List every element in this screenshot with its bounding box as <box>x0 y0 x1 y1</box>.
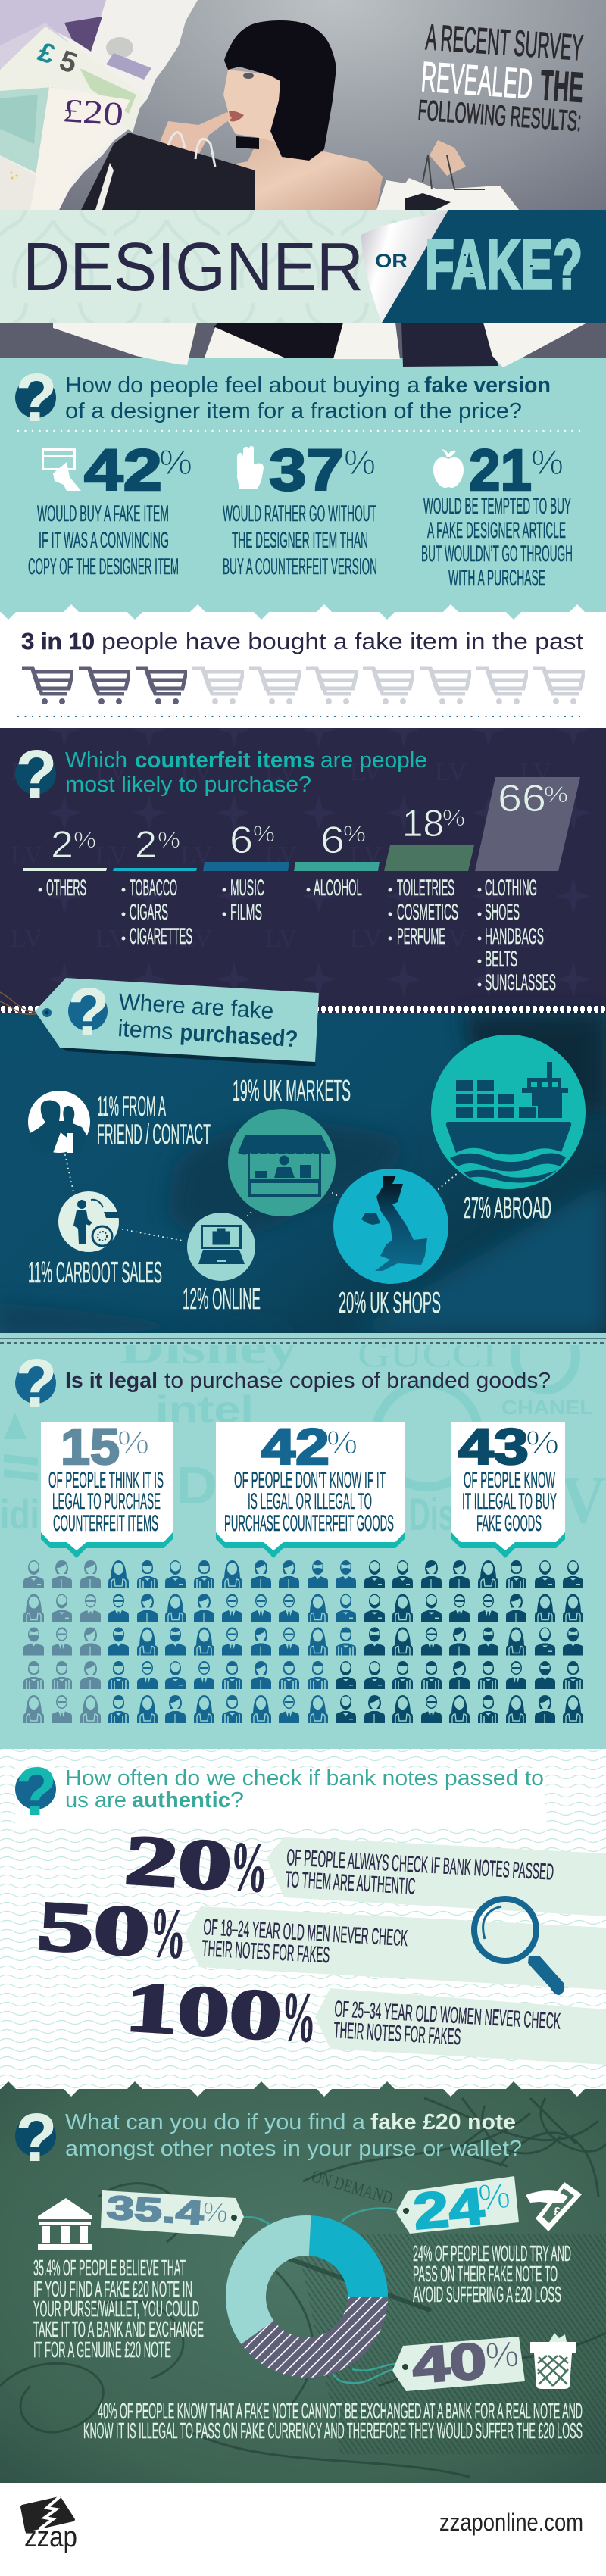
callout: 42%: % <box>326 1424 358 1461</box>
panel: where fake items are purchased: 11% CARBOOT SALES <box>28 1257 162 1289</box>
panel: fake £20 note: YOUR PURSE/WALLET, YOU COULD <box>33 2297 199 2322</box>
callout: 42% <box>216 1419 405 1558</box>
bar values: % <box>442 806 465 831</box>
panel: is it legal: OF PEOPLE THINK IT IS <box>48 1468 164 1493</box>
node: online <box>183 1213 261 1316</box>
panel: is it legal: PURCHASE COUNTERFEIT GOODS <box>224 1511 394 1536</box>
bar values: 6 <box>320 819 345 861</box>
stat band: 20% <box>123 1821 606 1916</box>
heading: amongst other notes in your purse or wallet? <box>65 2137 522 2161</box>
panel: fake £20 note <box>0 2081 606 2483</box>
tag: 40%: 40 <box>411 2332 489 2394</box>
heading: fake version <box>424 373 551 398</box>
header text: a recent survey <box>417 17 585 138</box>
website address: zzaponline.com <box>439 2509 583 2536</box>
heading: people have bought a fake item in the past <box>102 628 583 654</box>
heading: 3 in 10 <box>21 628 95 654</box>
panel: fake £20 note: ON DEMAND <box>309 2167 395 2209</box>
panel: where fake items are purchased: 19% UK MARKETS <box>233 1075 351 1107</box>
text: bank belief <box>33 2256 204 2362</box>
donut chart <box>226 2215 388 2378</box>
text: bank belief: IT FOR A GENUINE £20 NOTE <box>33 2338 171 2362</box>
icon row: shopping carts <box>22 668 584 704</box>
icon: hand passing note <box>526 2182 582 2231</box>
heading <box>65 2110 522 2161</box>
category lists: OTHERS <box>46 876 86 901</box>
panel: is it legal <box>0 1322 606 1750</box>
node: UK markets <box>228 1075 351 1216</box>
banknote engraving texture <box>0 2098 606 2477</box>
banknotes collage <box>0 0 198 210</box>
category lists <box>38 876 556 995</box>
node: abroad <box>431 1035 586 1225</box>
ghost brand logos: Disney <box>120 1322 298 1374</box>
category lists: ALCOHOL <box>314 876 362 901</box>
banknotes collage: £ <box>34 36 59 70</box>
stat: 21% <box>421 438 573 591</box>
bar values: 2 <box>135 823 157 866</box>
bar values: % <box>253 822 275 847</box>
node: friend or contact <box>28 1091 211 1154</box>
node: UK shops <box>333 1169 448 1319</box>
bar values: % <box>158 828 180 853</box>
logo: zzap: zzap <box>24 2521 77 2553</box>
panel: teal survey section <box>0 210 606 612</box>
heading: How do people feel about buying a <box>65 373 420 398</box>
callout: 42%: 42 <box>261 1419 330 1475</box>
price tag heading <box>0 975 319 1066</box>
tag: 40% <box>333 2332 525 2394</box>
question icon: ? <box>16 1346 57 1422</box>
question icon: ? <box>16 361 57 436</box>
price tag heading: Where are fake <box>118 988 274 1024</box>
heading: Is it legal <box>65 1369 158 1393</box>
panel: header photo <box>0 0 606 364</box>
panel: is it legal: LEGAL TO PURCHASE <box>52 1489 161 1514</box>
icon: bank <box>38 2198 92 2250</box>
category lists: TOILETRIES <box>397 876 454 901</box>
heading: What can you do if you find a <box>65 2110 366 2134</box>
banknotes collage: £20 <box>61 92 125 133</box>
heading: of a designer item for a fraction of the price? <box>65 399 522 423</box>
callout: 43% <box>451 1419 565 1558</box>
stat: 42% <box>28 438 192 579</box>
ghost brand logos: CHANEL <box>501 1396 593 1419</box>
panel: where fake items are purchased: 20% UK SHOPS <box>339 1287 441 1319</box>
tag: 24% <box>342 2175 519 2240</box>
bar chart <box>23 777 580 871</box>
category lists: FILMS <box>230 900 262 925</box>
stat: 42%: IF IT WAS A CONVINCING <box>39 528 169 553</box>
tag: 35.4% <box>101 2189 270 2237</box>
panel: teal survey section: BUY A COUNTERFEIT VERSION <box>223 554 377 579</box>
bags below banner <box>53 323 587 367</box>
panel: fake £20 note: 35.4% OF PEOPLE BELIEVE THAT <box>33 2256 186 2281</box>
stat: 42%: % <box>159 442 192 482</box>
price tag heading: purchased? <box>180 1019 298 1052</box>
bar values: 66 <box>498 777 546 820</box>
heading: authentic <box>132 1788 230 1813</box>
icon: hand passing note: £ <box>554 2206 561 2218</box>
bar values: 2 <box>51 823 73 866</box>
panel: 3 in 10 people <box>0 604 606 728</box>
ghost brand logos: D <box>176 1456 217 1515</box>
icon: raised hand <box>237 446 264 489</box>
stat: 42%: 42 <box>84 438 162 503</box>
node: carboot sales <box>28 1191 162 1289</box>
category lists: COSMETICS <box>397 900 458 925</box>
price tag heading: items <box>117 1015 174 1044</box>
heading: are people <box>320 748 427 773</box>
stat: 42%: WOULD BUY A FAKE ITEM <box>37 501 169 526</box>
ghost brand logos <box>2 1345 605 1530</box>
callout: 43%: % <box>526 1424 559 1461</box>
panel: teal survey section: WOULD RATHER GO WITHOUT <box>223 501 376 526</box>
stat band: 100%: % <box>279 1978 319 2057</box>
ghost brand logos: idi <box>0 1491 39 1538</box>
title words <box>23 225 583 305</box>
stat band: 50%: 50 <box>36 1887 152 1972</box>
tag: 35.4%: % <box>202 2196 229 2228</box>
callout: 15%: COUNTERFEIT ITEMS <box>53 1511 158 1536</box>
bar values: % <box>343 822 366 847</box>
stat band: 50%: THEIR NOTES FOR FAKES <box>201 1936 330 1968</box>
stat band: 20%: TO THEM ARE AUTHENTIC <box>285 1867 416 1900</box>
bar values: 6 <box>230 819 253 861</box>
callout: 42%: IS LEGAL OR ILLEGAL TO <box>248 1489 372 1514</box>
panel: footer <box>0 2483 606 2576</box>
category lists: SHOES <box>485 900 520 925</box>
panel: checking bank notes <box>0 1749 606 2097</box>
stat: 37% <box>223 438 377 579</box>
category lists: CLOTHING <box>485 876 537 901</box>
callout: 15% <box>41 1419 173 1558</box>
panel: teal survey section: THE DESIGNER ITEM THAN <box>232 528 368 553</box>
heading: Which <box>65 748 127 773</box>
heading <box>65 373 551 423</box>
heading: most likely to purchase? <box>65 773 311 797</box>
panel: fake £20 note: TAKE IT TO A BANK AND EXCHANGE <box>33 2318 204 2342</box>
ghost brand logos: intel <box>155 1388 254 1431</box>
callout: 43%: 43 <box>458 1419 529 1475</box>
category lists: BELTS <box>485 947 517 972</box>
icon: hand holding card <box>42 448 81 491</box>
stat: 21%: 21 <box>469 438 532 503</box>
panel: where fake items are purchased <box>0 975 606 1333</box>
title words: DESIGNER <box>23 229 364 305</box>
stat band: 20%: % <box>227 1828 270 1907</box>
tag: 24%: 24 <box>411 2178 486 2240</box>
node: friend or contact: 11% FROM A <box>97 1091 166 1122</box>
callout: 15%: 15 <box>61 1419 120 1475</box>
stat band: 50%: % <box>147 1894 189 1974</box>
heading <box>65 1766 544 1813</box>
question icon: ? <box>16 737 57 813</box>
stat: 37%: 37 <box>269 438 344 503</box>
category lists: MUSIC <box>230 876 264 901</box>
question icon: ? <box>16 1754 57 1830</box>
heading: to purchase copies of branded goods? <box>164 1369 551 1393</box>
tag: 35.4%: 35.4 <box>105 2189 205 2232</box>
ghost brand logos: GUCCI <box>358 1332 497 1375</box>
category lists: PERFUME <box>397 924 445 949</box>
icon: waste bin <box>530 2333 576 2389</box>
callout: 15%: % <box>117 1424 149 1461</box>
stat: 37%: % <box>344 442 376 482</box>
heading: counterfeit items <box>135 748 315 773</box>
banknotes collage: 5 <box>55 45 81 80</box>
title words: OR <box>375 251 408 272</box>
panel: counterfeit items <box>0 728 606 1013</box>
pictogram grid: 100 people <box>23 1560 583 1723</box>
title banner <box>0 210 606 323</box>
heading: ? <box>230 1788 244 1813</box>
icon: magnifying glass <box>474 1899 564 1995</box>
bar values: 18 <box>402 802 444 845</box>
panel: fake £20 note: IF YOU FIND A FAKE £20 NOTE IN <box>33 2278 192 2302</box>
price tag heading: ? <box>68 975 109 1051</box>
text: pass on note <box>413 2242 571 2307</box>
category lists: CIGARETTES <box>130 924 192 949</box>
tag: 40%: % <box>484 2334 520 2377</box>
woman with shopping bags <box>81 20 519 210</box>
tag: 24%: % <box>476 2175 512 2218</box>
heading <box>65 748 427 797</box>
icon: apple <box>433 449 464 488</box>
text: suffer the loss <box>83 2400 583 2443</box>
heading: How often do we check if bank notes passed to <box>65 1766 544 1791</box>
panel: where fake items are purchased: 12% ONLINE <box>183 1283 261 1316</box>
ghost brand logos: Dis <box>409 1489 454 1540</box>
bar values: % <box>544 782 568 807</box>
logo: zzap <box>20 2496 77 2553</box>
stat band: 100% <box>123 1968 606 2065</box>
category lists: CIGARS <box>130 900 168 925</box>
stat band: 50% <box>36 1887 606 1990</box>
bar values <box>51 777 568 866</box>
stat: 21%: % <box>531 442 564 482</box>
panel: where fake items are purchased: FRIEND / CONTACT <box>97 1119 211 1150</box>
category lists: TOBACCO <box>130 876 177 901</box>
question icon: ? <box>16 2100 57 2176</box>
stat band: 20%: 20 <box>123 1821 234 1906</box>
bar values: % <box>73 828 96 853</box>
stat band: 100%: 100 <box>123 1968 284 2056</box>
heading: fake £20 note <box>370 2110 516 2134</box>
heading: us are <box>65 1788 127 1813</box>
panel: teal survey section: COPY OF THE DESIGNER ITEM <box>28 554 179 579</box>
callout: 42%: OF PEOPLE DON’T KNOW IF IT <box>234 1468 386 1493</box>
